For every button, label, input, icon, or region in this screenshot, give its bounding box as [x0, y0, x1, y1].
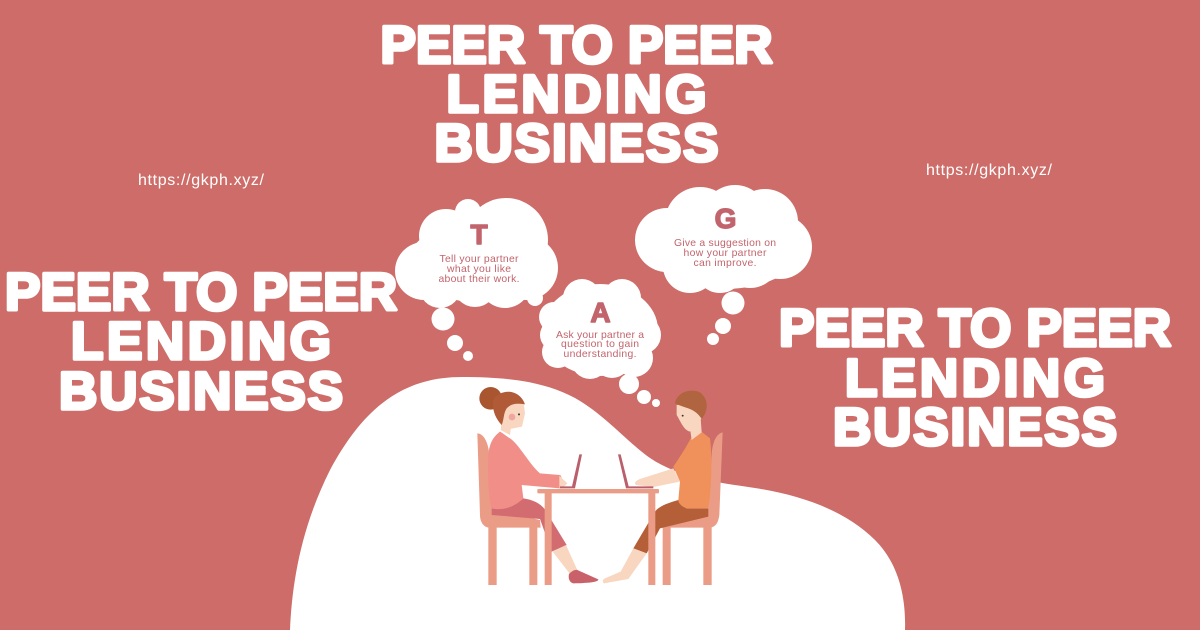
illustration: two people at a table — [477, 387, 723, 585]
thought bubble G — [635, 185, 812, 345]
white blob — [290, 377, 905, 630]
text G — [674, 238, 776, 269]
letter A: A — [590, 297, 611, 328]
woman's legs — [492, 498, 567, 552]
text T: what you like — [446, 264, 511, 275]
woman's hand — [559, 476, 567, 488]
man's head — [675, 391, 707, 440]
heading: left — [5, 263, 397, 421]
text T: about their work. — [438, 274, 520, 285]
heading: right — [779, 299, 1171, 457]
letter T: T — [470, 219, 488, 250]
laptops — [560, 454, 582, 488]
table — [537, 489, 659, 585]
heading: top: PEER TO PEER — [380, 16, 772, 75]
letter G: G — [715, 203, 736, 234]
man's legs — [633, 500, 708, 553]
man's torso — [673, 431, 711, 508]
text A: understanding. — [564, 349, 636, 360]
woman's chair — [477, 433, 541, 585]
woman's torso — [488, 432, 562, 509]
text A — [556, 330, 644, 360]
woman's head — [479, 387, 525, 435]
heading: top — [380, 16, 772, 173]
heading: top: LENDING — [446, 65, 706, 124]
text G: how your partner — [684, 248, 767, 259]
text T — [438, 254, 520, 285]
text A: Ask your partner a — [556, 330, 644, 341]
heading: top: BUSINESS — [434, 114, 718, 173]
man's chair — [659, 432, 723, 585]
heading: left: BUSINESS — [59, 362, 343, 421]
text A: question to gain — [561, 339, 639, 350]
man's arm — [635, 468, 680, 487]
text T: Tell your partner — [440, 254, 519, 265]
text G: Give a suggestion on — [674, 238, 776, 249]
heading: right: PEER TO PEER — [779, 299, 1171, 358]
heading: left: LENDING — [71, 312, 331, 371]
url left: https://gkph.xyz/ — [138, 172, 265, 189]
thought bubble T — [395, 198, 558, 361]
heading: left: PEER TO PEER — [5, 263, 397, 322]
thought bubble A — [539, 279, 661, 407]
heading: right: LENDING — [845, 349, 1105, 408]
text G: can improve. — [694, 258, 756, 269]
heading: right: BUSINESS — [833, 398, 1117, 457]
url right: https://gkph.xyz/ — [926, 162, 1053, 179]
